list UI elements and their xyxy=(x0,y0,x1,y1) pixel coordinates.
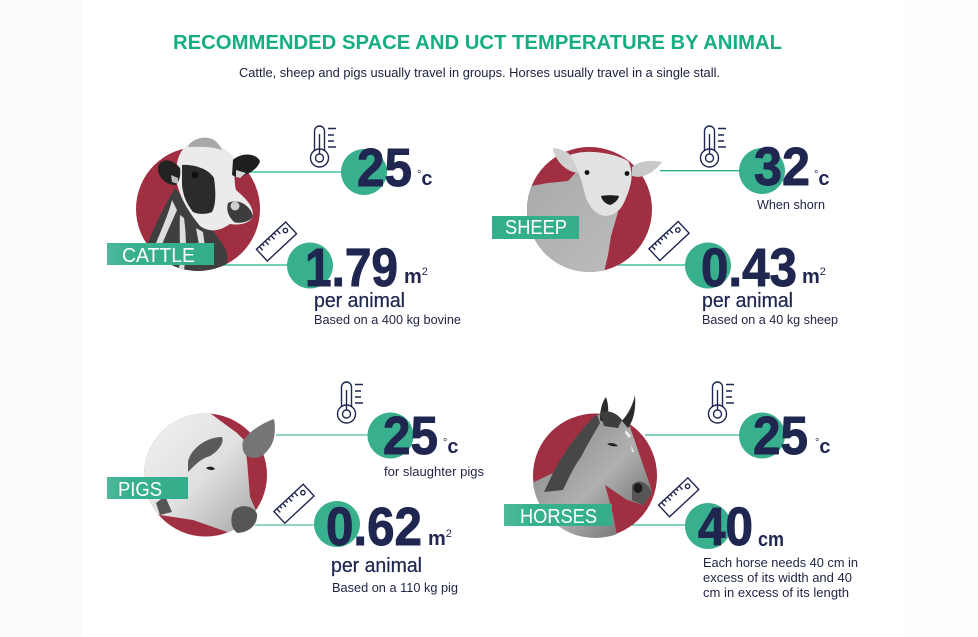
panel: pigs xyxy=(107,382,484,595)
temperature: pigs: ° xyxy=(443,437,447,449)
label: cattle: CATTLE xyxy=(122,245,195,267)
temperature: pigs xyxy=(368,406,484,479)
temperature: sheep: ° xyxy=(814,169,818,181)
temperature: cattle: c xyxy=(421,168,433,190)
icon: thermometer xyxy=(708,382,734,423)
icon: ruler xyxy=(649,222,689,260)
space: cattle: m xyxy=(404,266,422,288)
photo: horse xyxy=(530,395,652,540)
temperature: pigs: 25 xyxy=(383,406,438,466)
title: RECOMMENDED SPACE AND UCT TEMPERATURE BY ANIMAL xyxy=(173,32,782,54)
icon: thermometer xyxy=(310,126,336,167)
space: cattle: 2 xyxy=(422,266,428,278)
photo: sheep xyxy=(520,148,662,276)
photo: pig xyxy=(144,414,275,533)
space: horses: cm xyxy=(758,529,784,551)
temperature: horses xyxy=(739,406,831,466)
connector lines: horses xyxy=(632,435,745,525)
space: horses: cm in excess of its length xyxy=(703,586,849,600)
space: horses: excess of its width and 40 xyxy=(703,571,852,585)
space: sheep xyxy=(685,238,838,327)
label: horses: HORSES xyxy=(520,506,597,528)
panel: sheep xyxy=(492,126,838,327)
photo: cow xyxy=(147,138,260,275)
temperature: sheep xyxy=(739,137,830,212)
icon: ruler xyxy=(659,478,699,517)
connector lines: sheep xyxy=(617,171,745,265)
red circle: sheep xyxy=(527,147,652,272)
temperature: sheep: 32 xyxy=(754,137,810,197)
temperature: cattle: ° xyxy=(417,169,421,181)
label: pigs xyxy=(107,477,188,501)
space: cattle: Based on a 400 kg bovine xyxy=(314,313,461,327)
red circle: pigs xyxy=(144,414,267,536)
connector lines: cattle xyxy=(222,172,345,265)
label: sheep: SHEEP xyxy=(505,217,567,239)
space: sheep: per animal xyxy=(702,290,793,312)
space: pigs: Based on a 110 kg pig xyxy=(332,581,458,595)
icon: ruler xyxy=(256,222,297,261)
temperature: horses: ° xyxy=(815,437,819,449)
space: horses: 40 xyxy=(698,497,753,557)
panel: horses xyxy=(504,382,858,600)
panel: cattle xyxy=(107,126,461,327)
space: cattle: 1.79 xyxy=(305,238,398,298)
space: pigs: per animal xyxy=(331,555,422,577)
space: horses xyxy=(685,497,858,600)
space: pigs: m xyxy=(428,528,446,550)
temperature: pigs: for slaughter pigs xyxy=(384,465,484,479)
temperature: cattle xyxy=(341,138,433,198)
space: sheep: m xyxy=(802,266,820,288)
space: sheep: 2 xyxy=(820,266,826,278)
temperature: sheep: c xyxy=(818,168,830,190)
space: sheep: Based on a 40 kg sheep xyxy=(702,313,838,327)
connector lines: pigs xyxy=(255,435,372,525)
label: cattle xyxy=(107,243,214,267)
space: horses: Each horse needs 40 cm in xyxy=(703,556,858,570)
icon: ruler xyxy=(274,484,314,523)
temperature: pigs: c xyxy=(447,436,459,458)
temperature: cattle: 25 xyxy=(357,138,412,198)
temperature: horses: c xyxy=(819,436,831,458)
red circle: horses xyxy=(533,414,657,538)
space: cattle: per animal xyxy=(314,290,405,312)
space: cattle xyxy=(287,238,461,327)
temperature: sheep: When shorn xyxy=(757,198,825,212)
icon: thermometer xyxy=(700,126,726,167)
icon: thermometer xyxy=(338,382,363,423)
temperature: horses: 25 xyxy=(753,406,808,466)
space: pigs: 2 xyxy=(446,528,452,540)
space: pigs: 0.62 xyxy=(326,497,422,557)
space: pigs xyxy=(314,497,458,595)
label: pigs: PIGS xyxy=(118,479,162,501)
space: sheep: 0.43 xyxy=(701,238,797,298)
red circle: cattle xyxy=(136,147,260,271)
subtitle: Cattle, sheep and pigs usually travel in groups. Horses usually travel in a single stall. xyxy=(239,66,720,80)
